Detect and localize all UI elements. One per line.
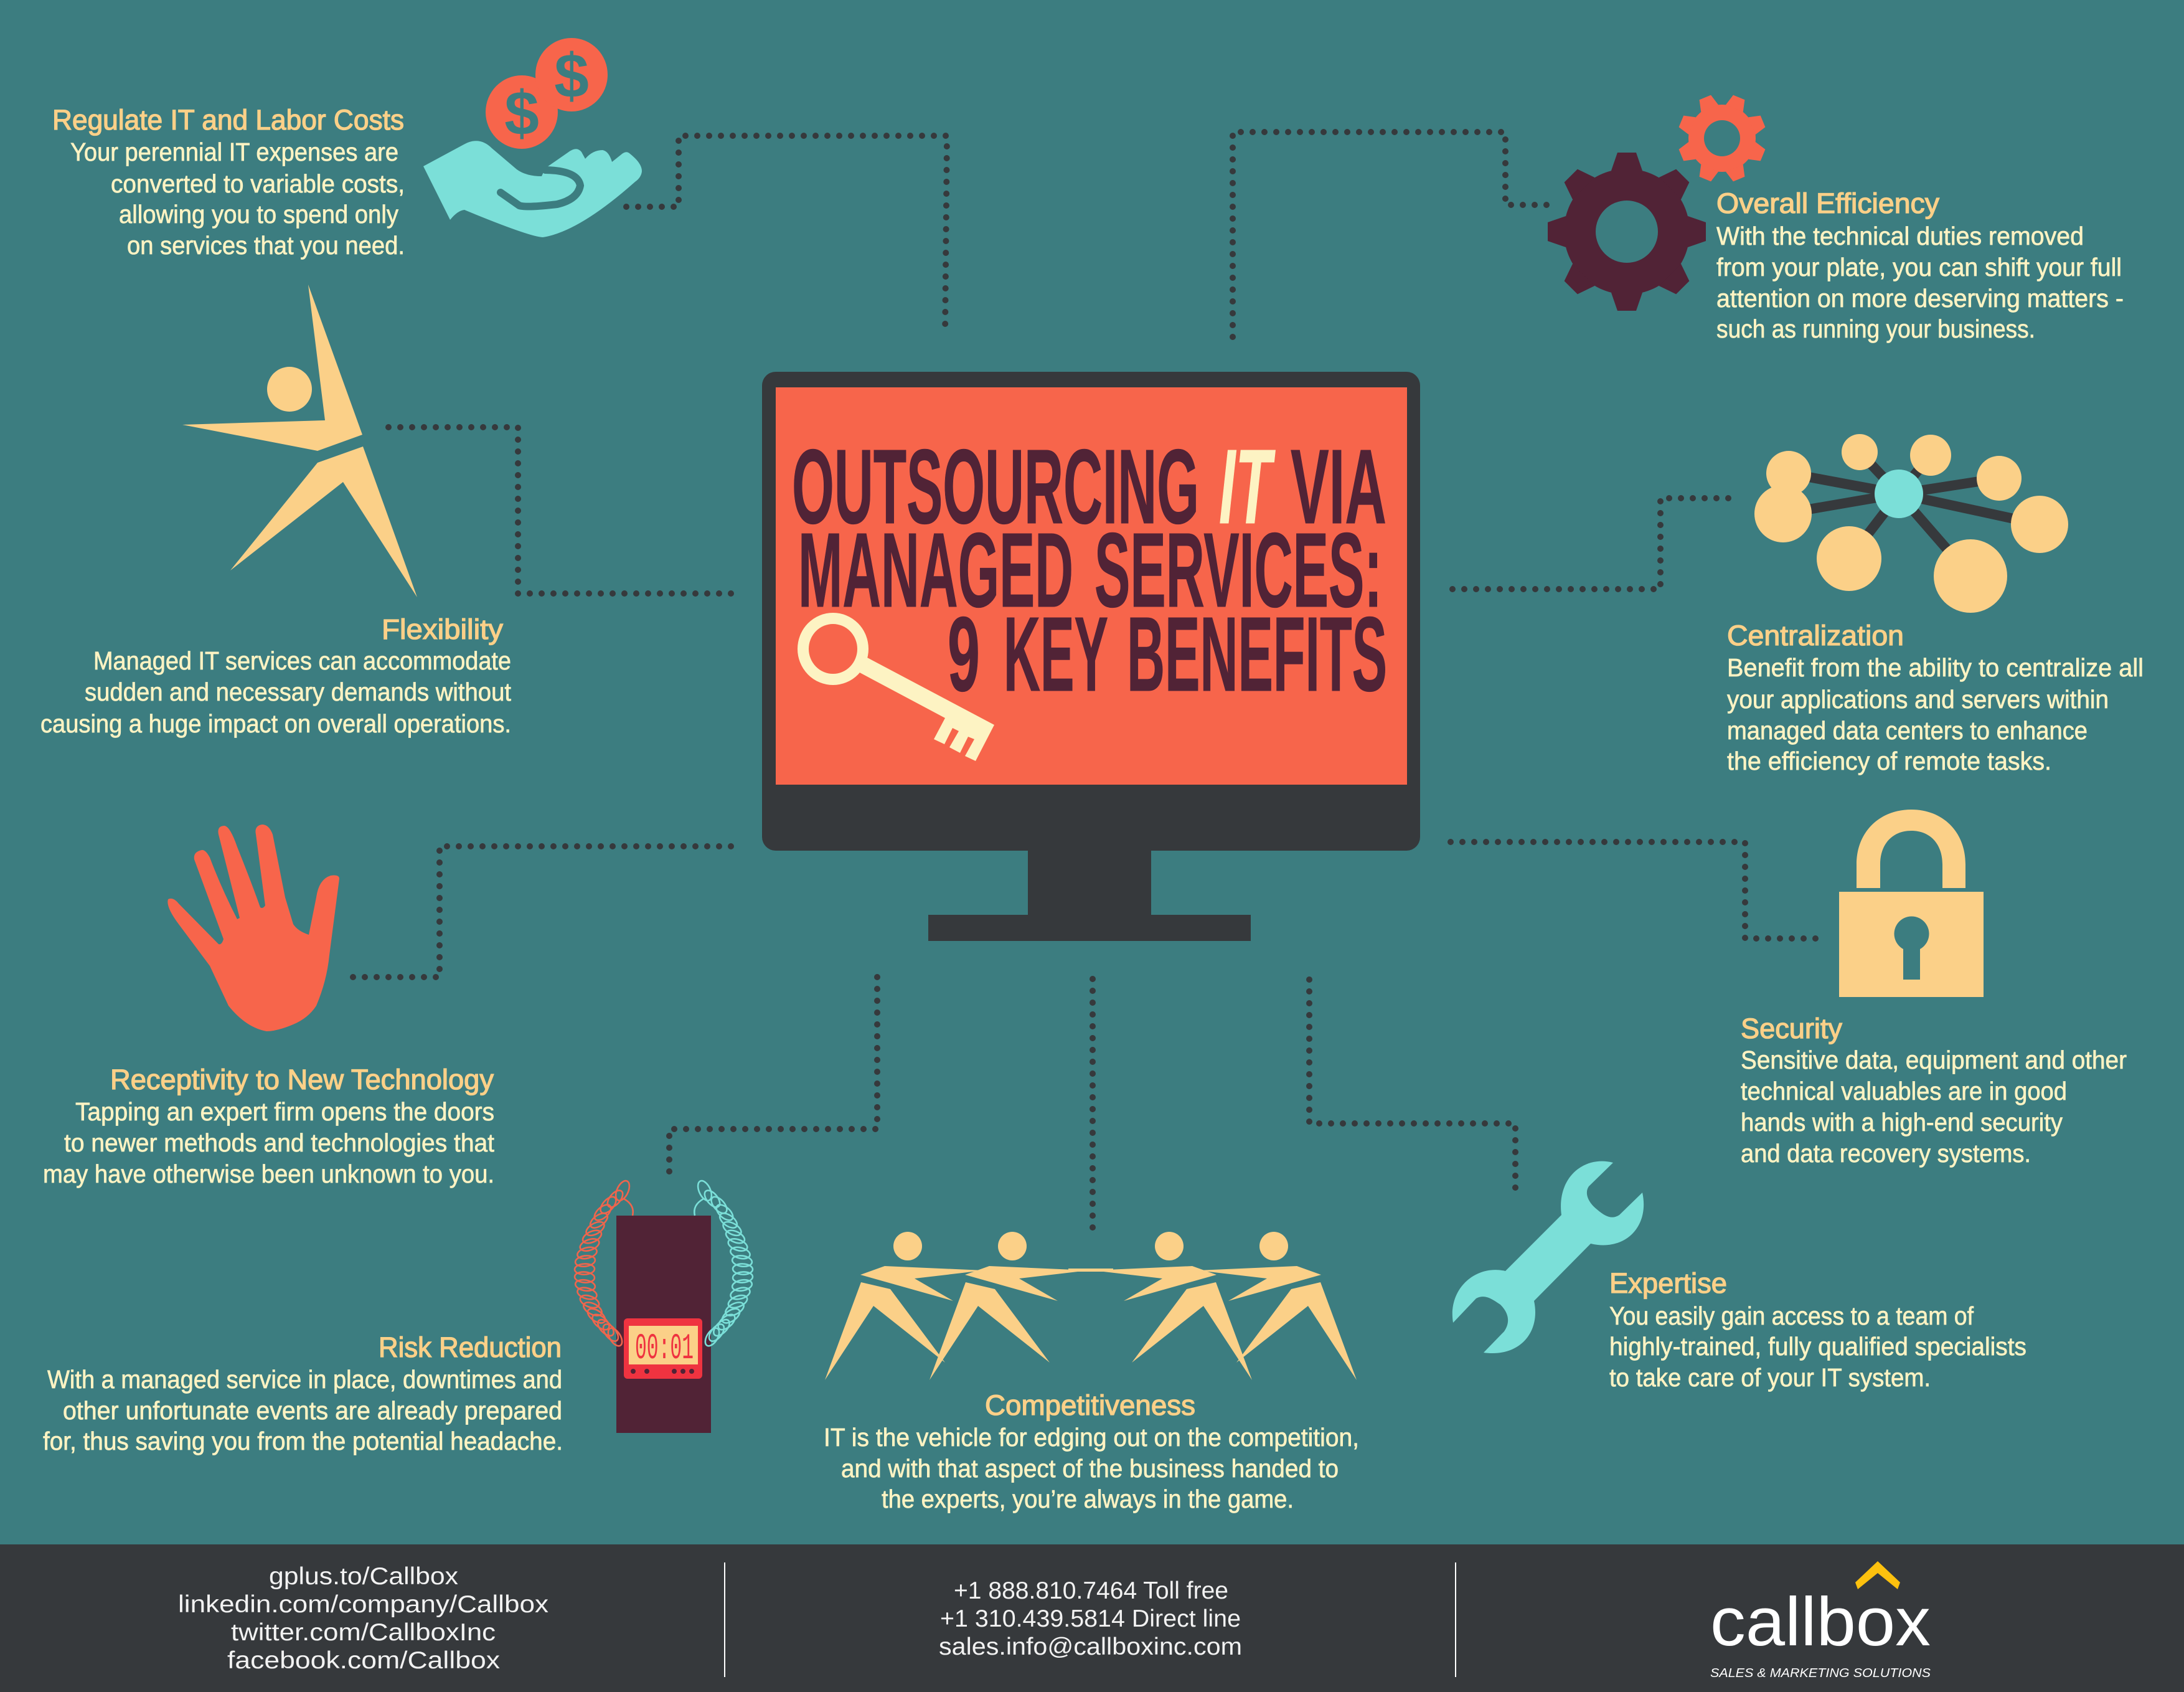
- text: overall efficiency: [1716, 187, 2124, 343]
- connector: efficiency: [1233, 132, 1550, 337]
- text: security: Sensitive data, equipment and other: [1741, 1046, 2127, 1074]
- text: regulate costs: converted to variable costs,: [111, 169, 405, 198]
- icon: hand with coins: $: [554, 41, 589, 111]
- contact details: +1 888.810.7464 Toll free: [954, 1577, 1228, 1604]
- logo: callbox: SALES & MARKETING SOLUTIONS: [1710, 1666, 1931, 1680]
- person three: [1093, 1232, 1252, 1380]
- icon: tug of war team: [825, 1232, 1357, 1380]
- monitor body: [762, 372, 1420, 851]
- text: risk reduction: other unfortunate events are already prepared: [63, 1396, 562, 1425]
- text: centralization: [1727, 620, 2144, 775]
- connector: competitiveness: [1090, 979, 1096, 1228]
- contact details: [939, 1577, 1242, 1660]
- text: overall efficiency: With the technical duties removed: [1716, 222, 2084, 250]
- text: risk reduction: Risk Reduction: [379, 1331, 562, 1363]
- text: flexibility: sudden and necessary demands without: [85, 678, 512, 706]
- logo: callbox: [1710, 1561, 1931, 1680]
- social links: twitter.com/CallboxInc: [231, 1619, 496, 1646]
- text: receptivity: to newer methods and technologies that: [64, 1128, 495, 1157]
- text: centralization: Centralization: [1727, 620, 1904, 651]
- text: security: hands with a high-end security: [1741, 1108, 2063, 1137]
- connector: risk reduction: [669, 975, 877, 1171]
- social links: gplus.to/Callbox: [269, 1563, 459, 1590]
- text: expertise: You easily gain access to a team of: [1609, 1302, 1974, 1330]
- monitor screen: [776, 387, 1407, 785]
- text: overall efficiency: such as running your business.: [1716, 314, 2035, 343]
- small gear: [1678, 94, 1766, 182]
- person one: [825, 1232, 984, 1380]
- text: centralization: managed data centers to enhance: [1727, 716, 2088, 745]
- social links: [178, 1563, 549, 1674]
- title: OUTSOURCING: [792, 428, 1199, 546]
- text: regulate costs: Your perennial IT expenses are: [70, 138, 398, 166]
- text: regulate costs: Regulate IT and Labor Costs: [52, 104, 404, 136]
- text: competitiveness: Competitiveness: [985, 1389, 1195, 1421]
- text: centralization: Benefit from the ability to centralize all: [1727, 653, 2144, 682]
- icon: time bomb: [574, 1179, 753, 1433]
- logo: callbox: callbox: [1710, 1584, 1931, 1660]
- text: centralization: your applications and servers within: [1727, 685, 2109, 714]
- monitor: BENEFITS: [1127, 595, 1387, 714]
- text: flexibility: causing a huge impact on overall operations.: [40, 709, 511, 738]
- text: competitiveness: the experts, you’re always in the game.: [882, 1485, 1294, 1513]
- text: risk reduction: With a managed service in place, downtimes and: [47, 1365, 562, 1394]
- connector: receptivity: [353, 846, 732, 977]
- connector: centralization: [1452, 498, 1738, 589]
- monitor stand: [928, 841, 1251, 941]
- text: receptivity: Tapping an expert firm opens the doors: [75, 1097, 494, 1126]
- connector: costs: [626, 136, 947, 334]
- text: regulate costs: allowing you to spend only: [119, 200, 398, 229]
- social links: linkedin.com/company/Callbox: [178, 1591, 549, 1618]
- text: expertise: Expertise: [1609, 1267, 1727, 1299]
- text: regulate costs: on services that you need.: [127, 231, 405, 260]
- social links: facebook.com/Callbox: [227, 1647, 501, 1674]
- icon: time bomb: 00:01: [635, 1329, 694, 1369]
- footer band: [0, 1544, 2184, 1692]
- text: risk reduction: for, thus saving you from the potential headache.: [43, 1427, 563, 1455]
- person four: [1198, 1232, 1357, 1380]
- text: centralization: the efficiency of remote tasks.: [1727, 747, 2051, 775]
- text: receptivity: Receptivity to New Technology: [110, 1064, 494, 1095]
- contact details: +1 310.439.5814 Direct line: [940, 1605, 1241, 1632]
- text: competitiveness: IT is the vehicle for edging out on the competition,: [824, 1423, 1359, 1452]
- title: [792, 428, 1387, 714]
- connector: flexibility: [388, 427, 732, 593]
- person two: [930, 1232, 1088, 1380]
- icon: open hand: [167, 825, 339, 1031]
- title: SERVICES:: [1094, 511, 1382, 630]
- text: security: technical valuables are in good: [1741, 1077, 2067, 1105]
- text: receptivity: [43, 1064, 495, 1188]
- title: KEY: [1004, 595, 1108, 714]
- icon: gears: [1548, 94, 1766, 311]
- monitor: [762, 372, 1420, 941]
- icon: wrench: [1452, 1161, 1644, 1353]
- text: overall efficiency: Overall Efficiency: [1716, 187, 1940, 219]
- large gear: [1548, 153, 1706, 311]
- text: security: [1741, 1013, 2127, 1168]
- text: expertise: highly-trained, fully qualified specialists: [1609, 1332, 2026, 1361]
- text: flexibility: Managed IT services can accommodate: [93, 646, 511, 675]
- text: expertise: [1609, 1267, 2026, 1392]
- title: 9: [948, 595, 980, 714]
- text: flexibility: Flexibility: [382, 613, 504, 645]
- text: competitiveness: and with that aspect of the business handed to: [841, 1454, 1339, 1483]
- text: overall efficiency: from your plate, you can shift your full: [1716, 253, 2122, 281]
- icon: key: [803, 618, 994, 761]
- text: competitiveness: [824, 1389, 1359, 1513]
- contact details: sales.info@callboxinc.com: [939, 1633, 1242, 1660]
- icon: flexible figure: [182, 285, 417, 597]
- text: overall efficiency: attention on more deserving matters -: [1716, 284, 2124, 313]
- connector: expertise: [1309, 980, 1515, 1198]
- icon: hand with coins: [423, 38, 642, 237]
- text: security: and data recovery systems.: [1741, 1139, 2031, 1168]
- text: flexibility: [40, 613, 512, 738]
- title: IT: [1219, 428, 1276, 546]
- rope: [1068, 1269, 1113, 1272]
- text: security: Security: [1741, 1013, 1842, 1044]
- title: MANAGED: [798, 511, 1073, 630]
- text: regulate costs: [52, 104, 405, 260]
- connector: security: [1451, 842, 1821, 938]
- text: expertise: to take care of your IT system.: [1609, 1363, 1931, 1392]
- title: VIA: [1291, 428, 1386, 546]
- text: risk reduction: [43, 1331, 563, 1455]
- icon: network hub: [1754, 434, 2068, 613]
- icon: padlock: [1839, 810, 1984, 997]
- icon: hand with coins: $: [504, 78, 539, 148]
- text: receptivity: may have otherwise been unknown to you.: [43, 1160, 494, 1188]
